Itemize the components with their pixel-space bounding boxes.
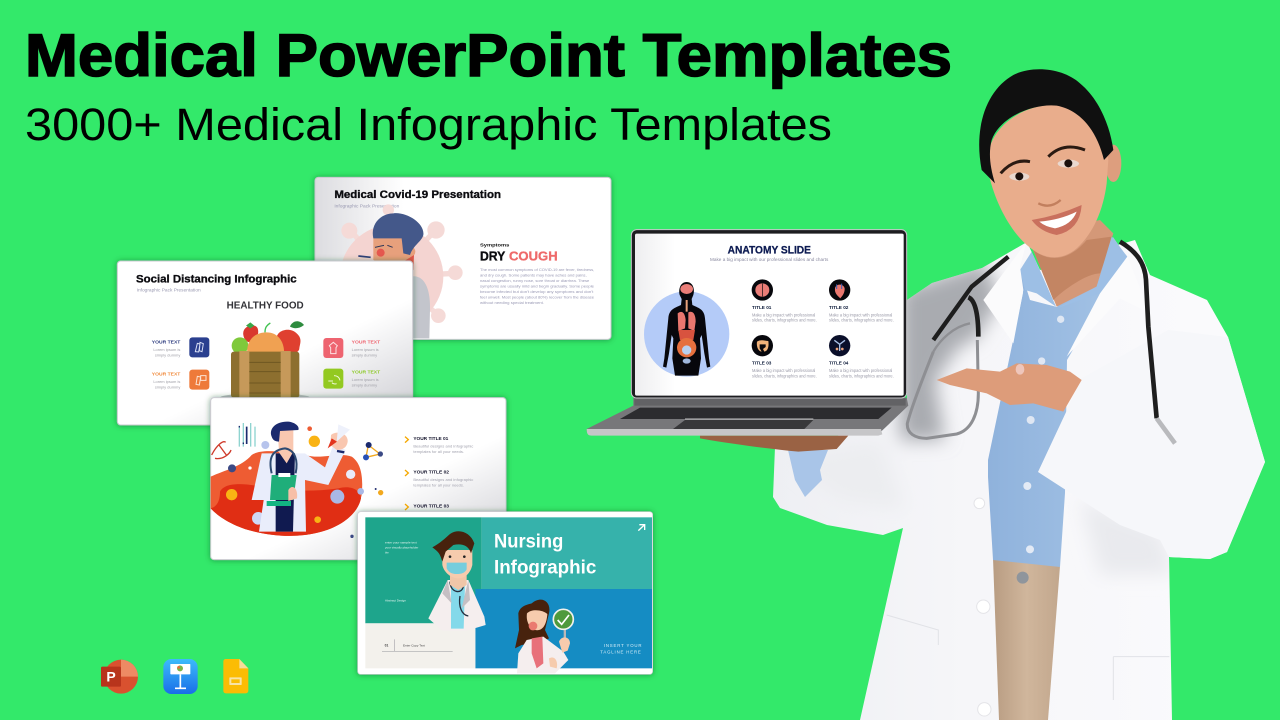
subtitle: 3000+ Medical Infographic Templates (25, 99, 832, 150)
icon row: app logos (101, 659, 248, 694)
panel: nursing slide (358, 512, 653, 674)
small text: teal block: Abstract Design (385, 599, 407, 603)
pants button (1017, 572, 1029, 584)
item: title 01: slides, charts, infographics and more. (752, 318, 817, 323)
slide heading: anatomy: ANATOMY SLIDE (728, 244, 811, 256)
slide heading: nursing: Infographic (494, 557, 597, 578)
illustration: doctor with flask (211, 422, 383, 538)
coat (773, 240, 1265, 720)
small text: cream block: Enter Copy Text (403, 644, 425, 648)
body text: symptoms: nasal congestion, runny nose, sore throat or diarrhea. These (480, 278, 590, 283)
icon: keynote (163, 659, 198, 694)
item: title 03 (752, 335, 817, 378)
shirt collar (1020, 237, 1127, 308)
body text: symptoms: feel unwell. Most people (about 80%) recover from the disease (480, 295, 595, 300)
item: bottom left: YOUR TEXT (152, 372, 180, 378)
nose (1038, 200, 1061, 206)
body text: symptoms: without needing special treatment. (480, 300, 544, 305)
list item 1: Beautiful designs and infographic (413, 445, 473, 449)
illustration: nurse with check sign (515, 600, 573, 673)
slide heading: social distancing: Social Distancing Infographic (136, 273, 297, 285)
small text: teal block: the (385, 551, 389, 555)
laptop screen (631, 230, 907, 398)
illustration: nurse with mask (428, 531, 486, 631)
ear (1105, 145, 1121, 182)
list item 1: templates for all your needs. (413, 450, 464, 454)
item: top left (152, 337, 209, 357)
illustration: body anatomy (644, 282, 729, 377)
icon: arrow (638, 525, 645, 531)
hand under laptop (700, 436, 848, 452)
eyes (1009, 159, 1079, 181)
item: title 02 (829, 279, 894, 323)
item: top left: Lorem ipsum is (153, 347, 180, 352)
panel: covid slide (315, 177, 611, 339)
list item 2: YOUR TITLE 02 (413, 469, 449, 474)
small text: teal block: enter your sample text (385, 541, 417, 545)
body text: symptoms: symptoms are usually mild and begin gradually. Some people (480, 284, 595, 289)
slide subheading: social distancing: Infographic Pack Presentation (137, 288, 201, 293)
panel: laptop (587, 230, 908, 452)
illustration: virus and patient (340, 204, 463, 338)
mouth (1032, 205, 1082, 235)
body text: symptoms: become infected but don't develop any symptoms and don't (480, 289, 594, 294)
item: top left: simply dummy (155, 352, 180, 357)
small text: cream block: 01 (385, 644, 389, 648)
lower details (887, 482, 1169, 716)
panel: doctor slide (211, 398, 506, 560)
item: title 04 (829, 335, 894, 378)
illustration: doctor (773, 69, 1265, 720)
shirt buttons lower (1023, 482, 1034, 553)
tagline (600, 643, 642, 654)
list item 2: templates for all your needs. (413, 483, 464, 487)
neck (1032, 220, 1113, 307)
slide heading: nursing (494, 531, 597, 578)
item: title 02: Make a big impact with professional (829, 312, 892, 317)
item: title 01: Make a big impact with professional (752, 312, 815, 317)
small text: teal block: your visually placeholder (385, 546, 418, 550)
item: title 02: TITLE 02 (829, 305, 849, 310)
icon: google slides (223, 659, 248, 693)
item: title 01 (752, 279, 817, 323)
heading: healthy food: HEALTHY FOOD (227, 300, 304, 311)
item: bottom right: Lorem ipsum is (352, 377, 379, 382)
coat collar left (983, 242, 1027, 343)
item: bottom left (152, 370, 209, 390)
list item 1 (405, 436, 473, 454)
list item 1: YOUR TITLE 01 (413, 436, 449, 441)
body text: symptoms: The most common symptoms of COVID-19 are fever, tiredness, (480, 267, 594, 272)
list item 2 (405, 469, 473, 487)
list item 2: Beautiful designs and infographic (413, 478, 473, 482)
item: title 02: slides, charts, infographics and more. (829, 318, 894, 323)
item: top right (323, 338, 380, 358)
slide heading: covid: Medical Covid-19 Presentation (334, 189, 501, 201)
coat buttons (974, 498, 991, 716)
body text: symptoms: and dry cough. Some patients may have aches and pains, (480, 273, 587, 278)
tagline: TAGLINE HERE (600, 649, 642, 654)
eyebrows (1001, 147, 1085, 173)
neck shadow (1033, 237, 1112, 300)
illustration: fruit crate (220, 321, 310, 402)
laptop base (587, 398, 908, 436)
item: title 01: TITLE 01 (752, 305, 772, 310)
headline: dry cough: DRY (480, 250, 506, 264)
coat shading (890, 262, 1173, 576)
stethoscope (907, 242, 1175, 443)
item: title 04: TITLE 04 (829, 361, 849, 366)
small text: cream block (382, 639, 453, 651)
item: top left: YOUR TEXT (152, 340, 180, 346)
icon: powerpoint (101, 660, 138, 694)
item: top right: Lorem ipsum is (352, 347, 379, 352)
teeth (1039, 212, 1077, 228)
item: bottom left: simply dummy (155, 384, 180, 389)
small text: teal block (385, 541, 418, 603)
item: title 04: Make a big impact with professional (829, 368, 892, 373)
label: symptoms: Symptoms (480, 243, 510, 248)
item: top right: simply dummy (352, 352, 377, 357)
item: bottom right (323, 369, 380, 389)
cuff: left sleeve (788, 450, 828, 497)
slide subheading: covid: Infographic Pack Presentation (334, 203, 400, 208)
panel: social distancing slide (117, 261, 413, 425)
face (988, 105, 1108, 257)
item: bottom right: simply dummy (352, 382, 377, 387)
item: bottom right: YOUR TEXT (352, 370, 380, 376)
thumb nail (1016, 364, 1024, 375)
shirt (988, 237, 1127, 567)
shirt buttons (1027, 316, 1064, 424)
title: Medical PowerPoint Templates (25, 22, 952, 89)
tagline: INSERT YOUR (604, 643, 642, 648)
coat collar right (1067, 257, 1150, 357)
body text: symptoms (480, 267, 595, 305)
list item 3 (405, 504, 449, 510)
slide heading: nursing: Nursing (494, 531, 563, 552)
headline: dry cough (480, 250, 558, 264)
hand (937, 363, 1082, 412)
icon: powerpoint: P (106, 669, 116, 685)
item: bottom left: Lorem ipsum is (153, 379, 180, 384)
item: title 04: slides, charts, infographics and more. (829, 373, 894, 378)
item: title 03: Make a big impact with professional (752, 368, 815, 373)
pants (993, 558, 1060, 720)
item: top right: YOUR TEXT (352, 340, 380, 346)
slide subheading: anatomy: Make a big impact with our professional slides and charts (710, 257, 828, 262)
pockets (887, 615, 1169, 700)
head and arm details (907, 69, 1175, 443)
item: title 03: slides, charts, infographics and more. (752, 373, 817, 378)
sleeve: raised right arm (1038, 330, 1265, 559)
hair (979, 69, 1113, 183)
item: title 03: TITLE 03 (752, 361, 772, 366)
headline: dry cough: COUGH (509, 250, 558, 264)
list item 3: YOUR TITLE 03 (413, 504, 449, 509)
